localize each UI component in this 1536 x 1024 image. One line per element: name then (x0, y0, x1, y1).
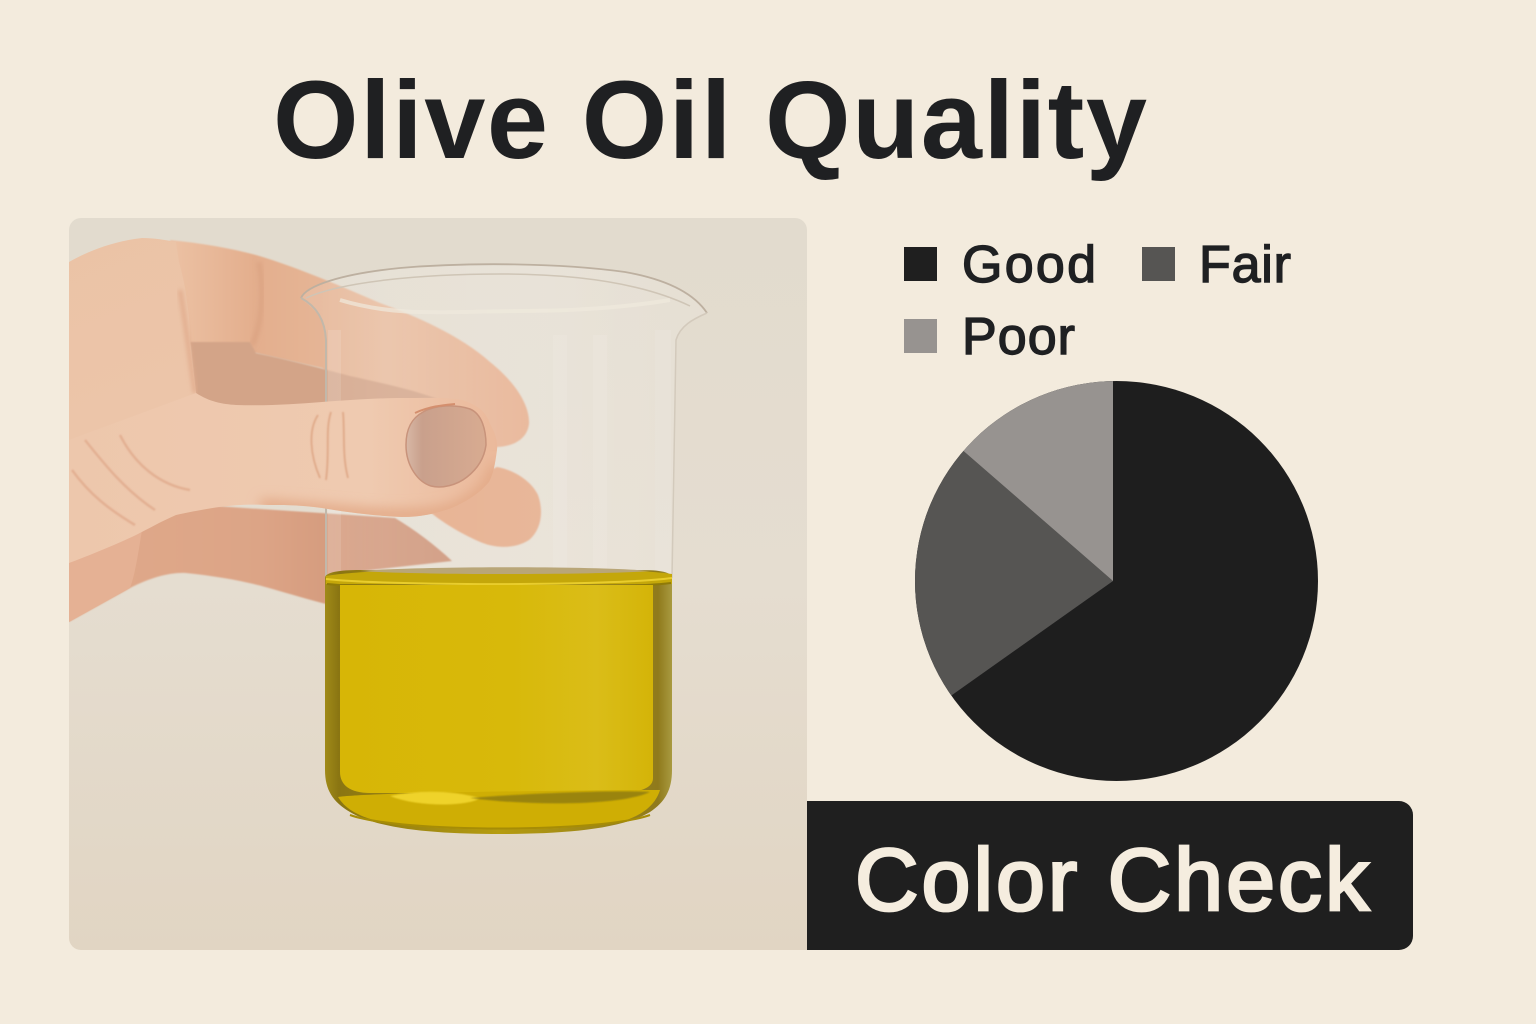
legend (904, 236, 1291, 366)
index finger (170, 240, 529, 447)
icon: beaker glass above oil (301, 264, 707, 580)
slice: Fair (915, 451, 1113, 696)
slice: Good (910, 376, 1324, 786)
label banner: Color Check (807, 801, 1413, 950)
shadow between index finger and thumb (190, 342, 433, 406)
fingertip right of thumb (430, 467, 541, 547)
outer oil and glass wall (325, 570, 672, 834)
legend item: Fair (1142, 236, 1291, 294)
title: Olive Oil Quality (273, 59, 1147, 182)
icon: thumb and back of hand in front of beaker (69, 238, 497, 563)
thumbnail (406, 406, 486, 487)
icon: olive oil (325, 567, 672, 834)
legend item: Good: Good (962, 236, 1096, 294)
legend item: Poor: Poor (962, 308, 1075, 366)
lens bottom of beaker (338, 790, 660, 830)
thumb underside shading (260, 465, 497, 516)
panel: photo of hand holding beaker of olive oil (69, 218, 807, 950)
legend item: Fair: Fair (1199, 236, 1291, 294)
palm crease (180, 290, 195, 393)
back of hand (69, 238, 196, 440)
legend item: Poor (904, 308, 1075, 366)
icon: fingers behind the beaker (69, 240, 541, 622)
pie chart (900, 376, 1324, 786)
main oil body (340, 585, 653, 793)
meniscus bands (326, 572, 672, 584)
legend item: Good (904, 236, 1096, 294)
thumb (69, 393, 497, 563)
slice: Poor (960, 376, 1113, 581)
lower finger (69, 505, 452, 622)
label banner: Color Check: Color Check (855, 830, 1370, 929)
crease shading on index knuckle (256, 266, 262, 333)
thumb knuckle creases (311, 412, 348, 480)
